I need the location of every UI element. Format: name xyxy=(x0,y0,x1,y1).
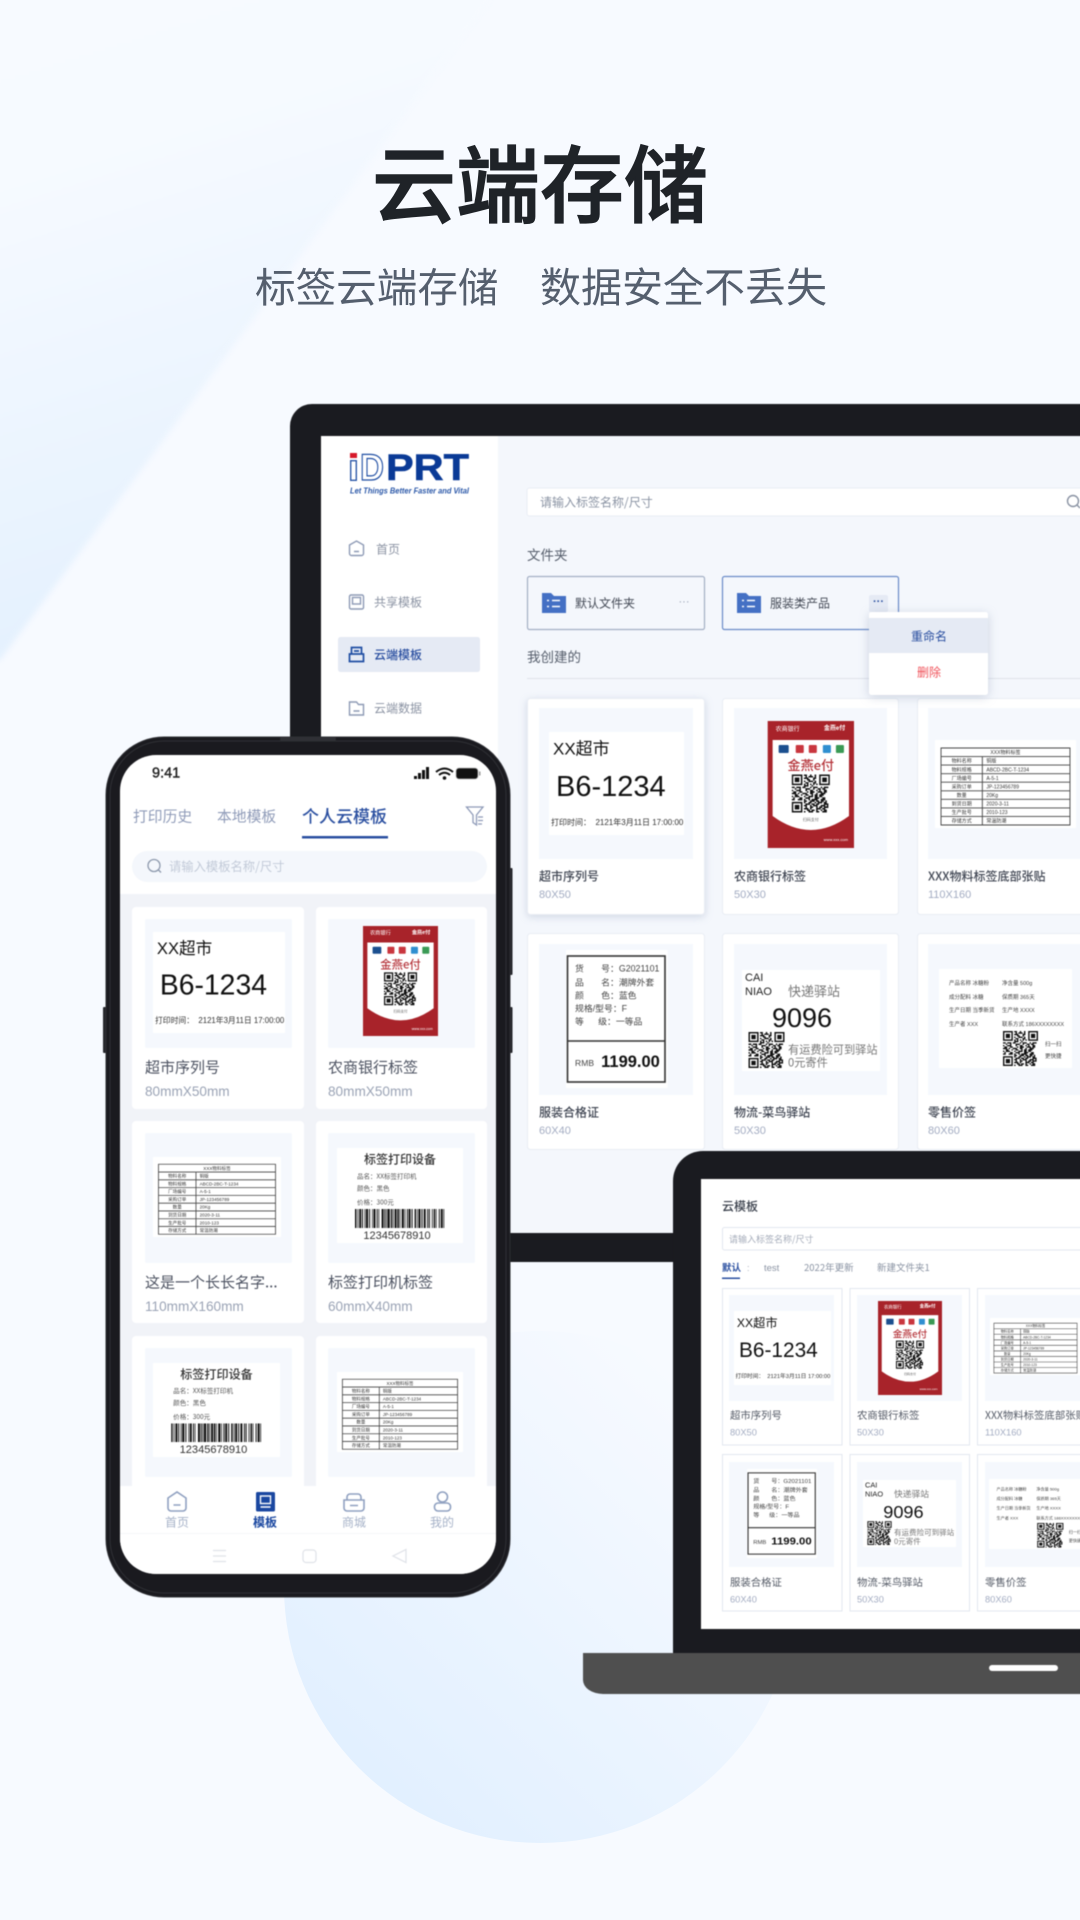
phone card: material label 2: 采购订单 xyxy=(352,1411,370,1418)
phone card: long name: 常温防潮 xyxy=(200,1227,218,1234)
card: material label: JP-123456789 xyxy=(986,784,1019,790)
logo xyxy=(350,447,470,496)
laptop card: material label: 20Kg xyxy=(1023,1352,1031,1356)
tab: home: 首页 xyxy=(165,1514,189,1530)
phone card: long name: JP-123456789 xyxy=(200,1197,230,1202)
phone card: long name: 2010-123 xyxy=(200,1220,219,1225)
status bar: 9:41 xyxy=(152,766,180,782)
tab: mall xyxy=(342,1494,366,1530)
phone card: bank label: 农商银行 xyxy=(370,929,391,937)
laptop card: material label: ABCD-2BC-T-1234 xyxy=(1023,1335,1051,1339)
card: courier label xyxy=(722,934,898,1150)
phone card: long name: 采购订单 xyxy=(168,1196,187,1203)
speaker xyxy=(280,737,336,741)
desktop monitor xyxy=(290,404,1080,1262)
card: retail price tag: 联系方式 186XXXXXXXX xyxy=(1002,1020,1064,1028)
card: bank label: www.xxx.com xyxy=(824,837,849,842)
phone card: bank label: 金燕e付 xyxy=(380,956,421,972)
laptop card: material label: 2020-3-11 xyxy=(1023,1357,1038,1361)
search: 请输入模板名称/尺寸 xyxy=(169,857,284,875)
subtitle: 标签云端存储 xyxy=(255,255,498,314)
nav: cloud data: 云端数据 xyxy=(374,700,422,717)
card: material label: 物料名称 xyxy=(952,758,972,765)
card: bank label: 50X30 xyxy=(734,889,766,901)
card: courier label: 快递驿站 xyxy=(788,981,840,1000)
phone card: material label 2 xyxy=(316,1336,487,1486)
phone card: long name: 110mmX160mm xyxy=(145,1299,244,1314)
phone card: material label 2: 数量 xyxy=(356,1419,366,1426)
tabs: 个人云模板 xyxy=(302,802,387,828)
phone card: long name: 这是一个长长名字... xyxy=(145,1272,278,1293)
card: courier label: 有运费险可到驿站 xyxy=(788,1041,878,1057)
phone card: supermarket serial: B6-1234 xyxy=(160,970,267,1002)
nav: cloud templates active: 云端模板 xyxy=(374,646,422,663)
card: retail price tag: 保质期 365天 xyxy=(1002,993,1035,1001)
tab: mall: 商城 xyxy=(342,1514,366,1530)
card: garment tag: 色：蓝色 xyxy=(601,990,637,1000)
card: retail price tag: 净含量 500g xyxy=(1002,979,1032,987)
laptop card: garment tag: 名：潮牌外套 xyxy=(771,1486,808,1494)
laptop tabs: : xyxy=(747,1263,750,1273)
phone card: long name: 厂场编号 xyxy=(168,1188,187,1195)
phone card: printer label 2: 颜色：黑色 xyxy=(173,1397,206,1407)
card: garment tag: 1199.00 xyxy=(601,1053,660,1071)
laptop screen xyxy=(701,1179,1080,1629)
card: supermarket serial: B6-1234 xyxy=(556,771,666,803)
card: retail price tag: 成分配料 冰糖 xyxy=(949,993,984,1001)
laptop card: bank label: www.xxx.com xyxy=(920,1387,938,1391)
card: courier label: NIAO xyxy=(745,986,772,998)
laptop card: retail price tag xyxy=(978,1454,1080,1611)
laptop card: bank label: 金燕e付 xyxy=(893,1326,928,1340)
card: material label: 采购订单 xyxy=(952,783,972,790)
phone card: material label 2: 2020-3-11 xyxy=(383,1428,404,1433)
laptop card: bank label: 扫码支付 xyxy=(904,1371,916,1376)
laptop card: retail price tag: 净含量 500g xyxy=(1036,1485,1059,1491)
card: retail price tag: 更快捷 xyxy=(1045,1052,1062,1060)
laptop card: material label: 铜版 xyxy=(1023,1329,1030,1334)
phone card: material label 2: 存储方式 xyxy=(352,1442,370,1449)
card: garment tag xyxy=(528,934,704,1150)
laptop card: bank label: 金燕e付 xyxy=(920,1303,936,1310)
card: courier label: 9096 xyxy=(772,1003,832,1033)
laptop card: garment tag: 品 xyxy=(753,1487,759,1494)
laptop tabs: 默认 xyxy=(722,1260,742,1274)
laptop tabs xyxy=(722,1260,930,1279)
phone card: bank label xyxy=(316,907,487,1109)
phone card: material label 2: ABCD-2BC-T-1234 xyxy=(383,1396,422,1401)
laptop card: bank label xyxy=(850,1288,970,1445)
title: 云端存储 xyxy=(372,120,708,241)
laptop card: material label: 生产批号 xyxy=(1001,1362,1014,1367)
nav: shared templates: 共享模板 xyxy=(374,594,422,611)
template grid xyxy=(120,894,496,1538)
card: material label: 物料规格 xyxy=(952,766,972,773)
laptop card: courier label: 9096 xyxy=(883,1502,924,1522)
laptop search: 请输入标签名称/尺寸 xyxy=(729,1232,814,1246)
dropdown menu xyxy=(869,612,988,695)
tab: templates active xyxy=(253,1492,277,1530)
phone card: printer label: 标签打印设备 xyxy=(364,1150,436,1168)
laptop card: material label: 到货日期 xyxy=(1001,1356,1014,1361)
phone card: bank label: 农商银行标签 xyxy=(328,1057,418,1078)
laptop card: retail price tag: 成分配料 冰糖 xyxy=(997,1495,1022,1501)
laptop card: material label: 物料规格 xyxy=(1001,1334,1014,1339)
laptop xyxy=(583,1151,1080,1694)
phone card: material label 2: 物料规格 xyxy=(352,1395,370,1402)
card: retail price tag: 生产者 XXX xyxy=(949,1020,978,1028)
card: material label: 厂场编号 xyxy=(952,775,972,782)
folder: default: ··· xyxy=(678,596,690,608)
card: garment tag: 货 xyxy=(575,963,584,973)
folder: default xyxy=(528,576,704,630)
phone card: printer label: 标签打印机标签 xyxy=(328,1272,433,1293)
phone card: material label 2: A-5-1 xyxy=(383,1404,394,1409)
phone card: material label 2: 物料名称 xyxy=(352,1388,370,1395)
laptop card: garment tag: 1199.00 xyxy=(771,1536,812,1547)
phone card: long name: 2020-3-11 xyxy=(200,1213,221,1218)
nav: cloud templates active xyxy=(338,637,480,672)
logo: D xyxy=(360,447,384,488)
card: supermarket serial: 打印时间： 2121年3月11日 17:00:00 xyxy=(551,817,684,827)
laptop card: garment tag: RMB xyxy=(753,1540,767,1546)
laptop card: bank label: 农商银行标签 xyxy=(857,1407,920,1422)
card: bank label: 农商银行标签 xyxy=(734,868,806,885)
dropdown menu: 删除 xyxy=(917,664,941,680)
subtitle: 数据安全不丢失 xyxy=(540,254,827,314)
phone card: material label 2: XXX物料标签 xyxy=(387,1380,414,1387)
laptop card: material label: JP-123456789 xyxy=(1023,1346,1044,1350)
card: bank label xyxy=(722,698,898,914)
phone card: printer label 2: 品名：XX标签打印机 xyxy=(173,1385,234,1395)
laptop card: material label: 数量 xyxy=(1004,1351,1011,1356)
laptop card: retail price tag: 生产地 XXXX xyxy=(1036,1505,1061,1510)
android navigation bar xyxy=(213,1550,406,1562)
laptop card: courier label: NIAO xyxy=(865,1490,883,1499)
laptop search xyxy=(722,1228,1080,1250)
card: retail price tag: 零售价签 xyxy=(928,1104,976,1121)
search bar: 请输入标签名称/尺寸 xyxy=(540,494,653,511)
card: retail price tag: 扫一扫 xyxy=(1045,1040,1062,1048)
nav: home: 首页 xyxy=(376,541,400,558)
phone card: long name xyxy=(132,1121,304,1323)
laptop card: supermarket serial: B6-1234 xyxy=(739,1339,818,1362)
card: garment tag: RMB xyxy=(575,1058,594,1068)
phone card: bank label: 扫码支付 xyxy=(394,1009,408,1014)
phone card: material label 2: JP-123456789 xyxy=(383,1412,413,1417)
phone card: material label 2: 铜版 xyxy=(383,1388,392,1395)
phone card: material label 2: 生产批号 xyxy=(352,1434,370,1441)
phone card: material label 2: 20Kg xyxy=(383,1420,394,1425)
dropdown menu: 重命名 xyxy=(911,628,947,644)
laptop card: garment tag: 货 xyxy=(753,1477,759,1485)
card: bank label: 金燕e付 xyxy=(788,755,834,774)
card: material label: 数量 xyxy=(957,792,967,799)
card: material label: 生产批号 xyxy=(952,809,972,816)
phone card: printer label: 品名：XX标签打印机 xyxy=(357,1170,417,1180)
phone card: supermarket serial: 打印时间： 2121年3月11日 17:00:00 xyxy=(155,1015,285,1025)
card: supermarket serial: 80X50 xyxy=(539,889,571,901)
laptop card: material label: 厂场编号 xyxy=(1001,1340,1014,1345)
card: bank label: 扫码支付 xyxy=(803,816,819,823)
tabs xyxy=(133,802,483,838)
card: courier label: 0元寄件 xyxy=(788,1054,828,1070)
laptop card: supermarket serial: XX超市 xyxy=(737,1315,778,1330)
card: material label: A-5-1 xyxy=(986,776,999,782)
card: supermarket serial xyxy=(528,698,704,914)
laptop card: bank label: 农商银行 xyxy=(884,1303,902,1310)
nav: home xyxy=(350,541,400,558)
phone card: material label 2: 常温防潮 xyxy=(383,1442,401,1449)
search bar xyxy=(527,488,1080,516)
phone card: printer label 2: 标签打印设备 xyxy=(180,1365,253,1382)
phone card: material label 2: 到货日期 xyxy=(352,1427,370,1434)
folder: apparel xyxy=(722,576,898,630)
phone card: supermarket serial: 80mmX50mm xyxy=(145,1084,230,1099)
laptop card: courier label: 物流-菜鸟驿站 xyxy=(857,1574,923,1589)
phone card: printer label: 12345678910 xyxy=(363,1230,431,1242)
smartphone xyxy=(103,737,512,1597)
card: garment tag: 颜 xyxy=(575,990,584,1000)
laptop card: retail price tag: 生产日期 当季新货 xyxy=(997,1505,1031,1510)
card: material label: 2020-3-11 xyxy=(986,802,1009,807)
laptop base xyxy=(583,1653,1080,1694)
laptop card: garment tag xyxy=(722,1454,842,1611)
side buttons xyxy=(103,868,512,1053)
heading: folders: 文件夹 xyxy=(527,544,568,564)
card: garment tag: 服装合格证 xyxy=(539,1104,599,1121)
phone card: long name: 存储方式 xyxy=(168,1227,187,1234)
laptop card: material label: XXX物料标签 xyxy=(1026,1323,1046,1328)
bottom tab bar xyxy=(120,1486,496,1574)
sidebar xyxy=(321,436,498,1233)
laptop card: supermarket serial: 超市序列号 xyxy=(730,1407,782,1422)
laptop card: material label: 110X160 xyxy=(985,1428,1022,1438)
card: bank label: 农商银行 xyxy=(776,725,800,733)
card: retail price tag: 生产地 XXXX xyxy=(1002,1006,1035,1014)
laptop card: supermarket serial: 打印时间： 2121年3月11日 17:00:00 xyxy=(735,1372,830,1380)
heading: created by me: 我创建的 xyxy=(527,646,581,666)
card: material label: 常温防潮 xyxy=(986,818,1006,825)
laptop card: material label: 采购订单 xyxy=(1001,1345,1014,1350)
tab: templates active: 模板 xyxy=(253,1514,277,1530)
laptop screen: 云模板 xyxy=(722,1198,758,1214)
laptop card: garment tag: 服装合格证 xyxy=(730,1574,782,1589)
nav: cloud data xyxy=(350,700,422,717)
laptop card: garment tag: 等 xyxy=(753,1511,759,1519)
laptop card: garment tag: 60X40 xyxy=(730,1594,757,1604)
card: garment tag: 级：一等品 xyxy=(598,1016,643,1026)
laptop card: material label: A-5-1 xyxy=(1023,1341,1031,1345)
laptop card: courier label xyxy=(850,1454,970,1611)
tabs: 本地模板 xyxy=(217,806,276,826)
laptop card: material label: 物料名称 xyxy=(1001,1329,1014,1334)
laptop card: supermarket serial: 80X50 xyxy=(730,1428,757,1438)
card: bank label: 金燕e付 xyxy=(824,724,845,732)
card: retail price tag: 产品名称 冰糖粉 xyxy=(949,979,990,987)
logo: Let Things Better Faster and Vital xyxy=(350,486,470,496)
folder: apparel: 服装类产品 xyxy=(770,594,830,612)
laptop card: garment tag: 色：蓝色 xyxy=(771,1494,796,1502)
tab: home xyxy=(165,1492,189,1530)
phone card: long name: 生产批号 xyxy=(168,1219,187,1226)
laptop card: material label: 存储方式 xyxy=(1001,1368,1014,1373)
laptop card: retail price tag: 零售价签 xyxy=(985,1574,1027,1589)
card: material label: XXX物料标签底部张贴 xyxy=(928,868,1045,885)
phone card: long name: XXX物料标签 xyxy=(203,1165,231,1172)
card: material label: 到货日期 xyxy=(952,801,972,807)
card: material label: ABCD-2BC-T-1234 xyxy=(986,767,1029,773)
card: garment tag: 品 xyxy=(575,978,584,987)
laptop card: retail price tag: 产品名称 冰糖粉 xyxy=(997,1485,1027,1491)
folder: default: 默认文件夹 xyxy=(575,594,635,612)
phone card: material label 2: 2010-123 xyxy=(383,1435,402,1440)
laptop card: garment tag: 号：G2021101 xyxy=(771,1478,811,1485)
laptop card: retail price tag: 生产者 XXX xyxy=(997,1514,1019,1520)
card: garment tag: 号：G2021101 xyxy=(601,964,660,973)
laptop card: courier label: 有运费险可到驿站 xyxy=(894,1527,955,1538)
tabs: 打印历史 xyxy=(133,806,192,826)
phone card: supermarket serial: XX超市 xyxy=(157,939,212,958)
phone card: bank label: www.xxx.com xyxy=(412,1027,433,1031)
phone card: long name: 20Kg xyxy=(200,1205,211,1210)
laptop card: courier label: CAI xyxy=(865,1480,877,1489)
logo: PRT xyxy=(386,447,469,488)
laptop card: garment tag: 级：一等品 xyxy=(769,1511,800,1519)
card: garment tag: 等 xyxy=(575,1016,584,1026)
phone card: long name: ABCD-2BC-T-1234 xyxy=(200,1181,239,1186)
phone card: bank label: 金燕e付 xyxy=(412,928,431,936)
card: garment tag: 规格/型号：F xyxy=(575,1003,628,1013)
phone card: long name: 到货日期 xyxy=(168,1212,187,1219)
laptop card: courier label: 0元寄件 xyxy=(894,1536,921,1547)
laptop card: retail price tag: 80X60 xyxy=(985,1594,1012,1604)
card: garment tag: 名：潮牌外套 xyxy=(601,977,654,987)
phone card: material label 2: 厂场编号 xyxy=(352,1403,370,1410)
nav: shared templates xyxy=(350,594,422,611)
laptop card: supermarket serial xyxy=(722,1288,842,1445)
phone card: printer label 2: 价格：300元 xyxy=(173,1411,211,1421)
card: garment tag: 60X40 xyxy=(539,1125,571,1137)
laptop card: garment tag: 规格/型号：F xyxy=(753,1503,789,1511)
tab: me xyxy=(430,1492,454,1530)
search xyxy=(132,851,487,882)
phone card: bank label: 80mmX50mm xyxy=(328,1084,413,1099)
card: retail price tag xyxy=(918,934,1080,1150)
card: material label: 2010-123 xyxy=(986,810,1008,816)
card: courier label: 物流-菜鸟驿站 xyxy=(734,1104,810,1121)
laptop card: material label xyxy=(978,1288,1080,1445)
card: retail price tag: 生产日期 当季新货 xyxy=(949,1006,995,1014)
phone card: long name: 物料名称 xyxy=(168,1173,187,1180)
card: retail price tag: 80X60 xyxy=(928,1125,960,1137)
phone card: printer label 2: 12345678910 xyxy=(180,1444,247,1456)
phone card: long name: 铜版 xyxy=(200,1173,209,1180)
laptop card: retail price tag: 保质期 365天 xyxy=(1036,1495,1061,1501)
laptop tabs: test xyxy=(764,1263,780,1274)
laptop card: material label: 2010-123 xyxy=(1023,1363,1037,1367)
card: courier label: CAI xyxy=(745,972,763,984)
card: supermarket serial: 超市序列号 xyxy=(539,868,599,885)
phone card: supermarket serial: 超市序列号 xyxy=(145,1057,220,1078)
card: material label: 110X160 xyxy=(928,889,971,901)
phone card: printer label: 60mmX40mm xyxy=(328,1299,413,1314)
card: material label xyxy=(918,698,1080,914)
phone card: printer label: 颜色：黑色 xyxy=(357,1182,390,1192)
laptop card: garment tag: 颜 xyxy=(753,1494,759,1502)
laptop tabs: 2022年更新 xyxy=(804,1260,854,1274)
card: material label: 铜版 xyxy=(986,758,996,765)
card: material label: XXX物料标签 xyxy=(990,749,1021,756)
card: courier label: 50X30 xyxy=(734,1125,766,1137)
phone card: printer label xyxy=(316,1121,487,1323)
card: material label: 存储方式 xyxy=(952,818,972,825)
laptop card: material label: 常温防潮 xyxy=(1023,1368,1036,1373)
card: material label: 20Kg xyxy=(986,793,998,799)
phone card: long name: 物料规格 xyxy=(168,1180,187,1187)
folder: apparel: ··· xyxy=(873,596,884,608)
laptop tabs: 新建文件夹1 xyxy=(877,1260,930,1274)
phone card: printer label: 价格：300元 xyxy=(357,1196,394,1206)
laptop card: courier label: 快递驿站 xyxy=(894,1487,929,1500)
tab: me: 我的 xyxy=(430,1514,454,1530)
phone card: long name: A-5-1 xyxy=(200,1189,211,1194)
phone card: printer label 2 xyxy=(132,1336,304,1486)
laptop card: bank label: 50X30 xyxy=(857,1428,884,1438)
card: supermarket serial: XX超市 xyxy=(553,740,610,758)
phone card: supermarket serial xyxy=(132,907,304,1109)
phone card: long name: 数量 xyxy=(173,1204,182,1211)
laptop card: courier label: 50X30 xyxy=(857,1594,884,1604)
status bar xyxy=(152,766,480,782)
